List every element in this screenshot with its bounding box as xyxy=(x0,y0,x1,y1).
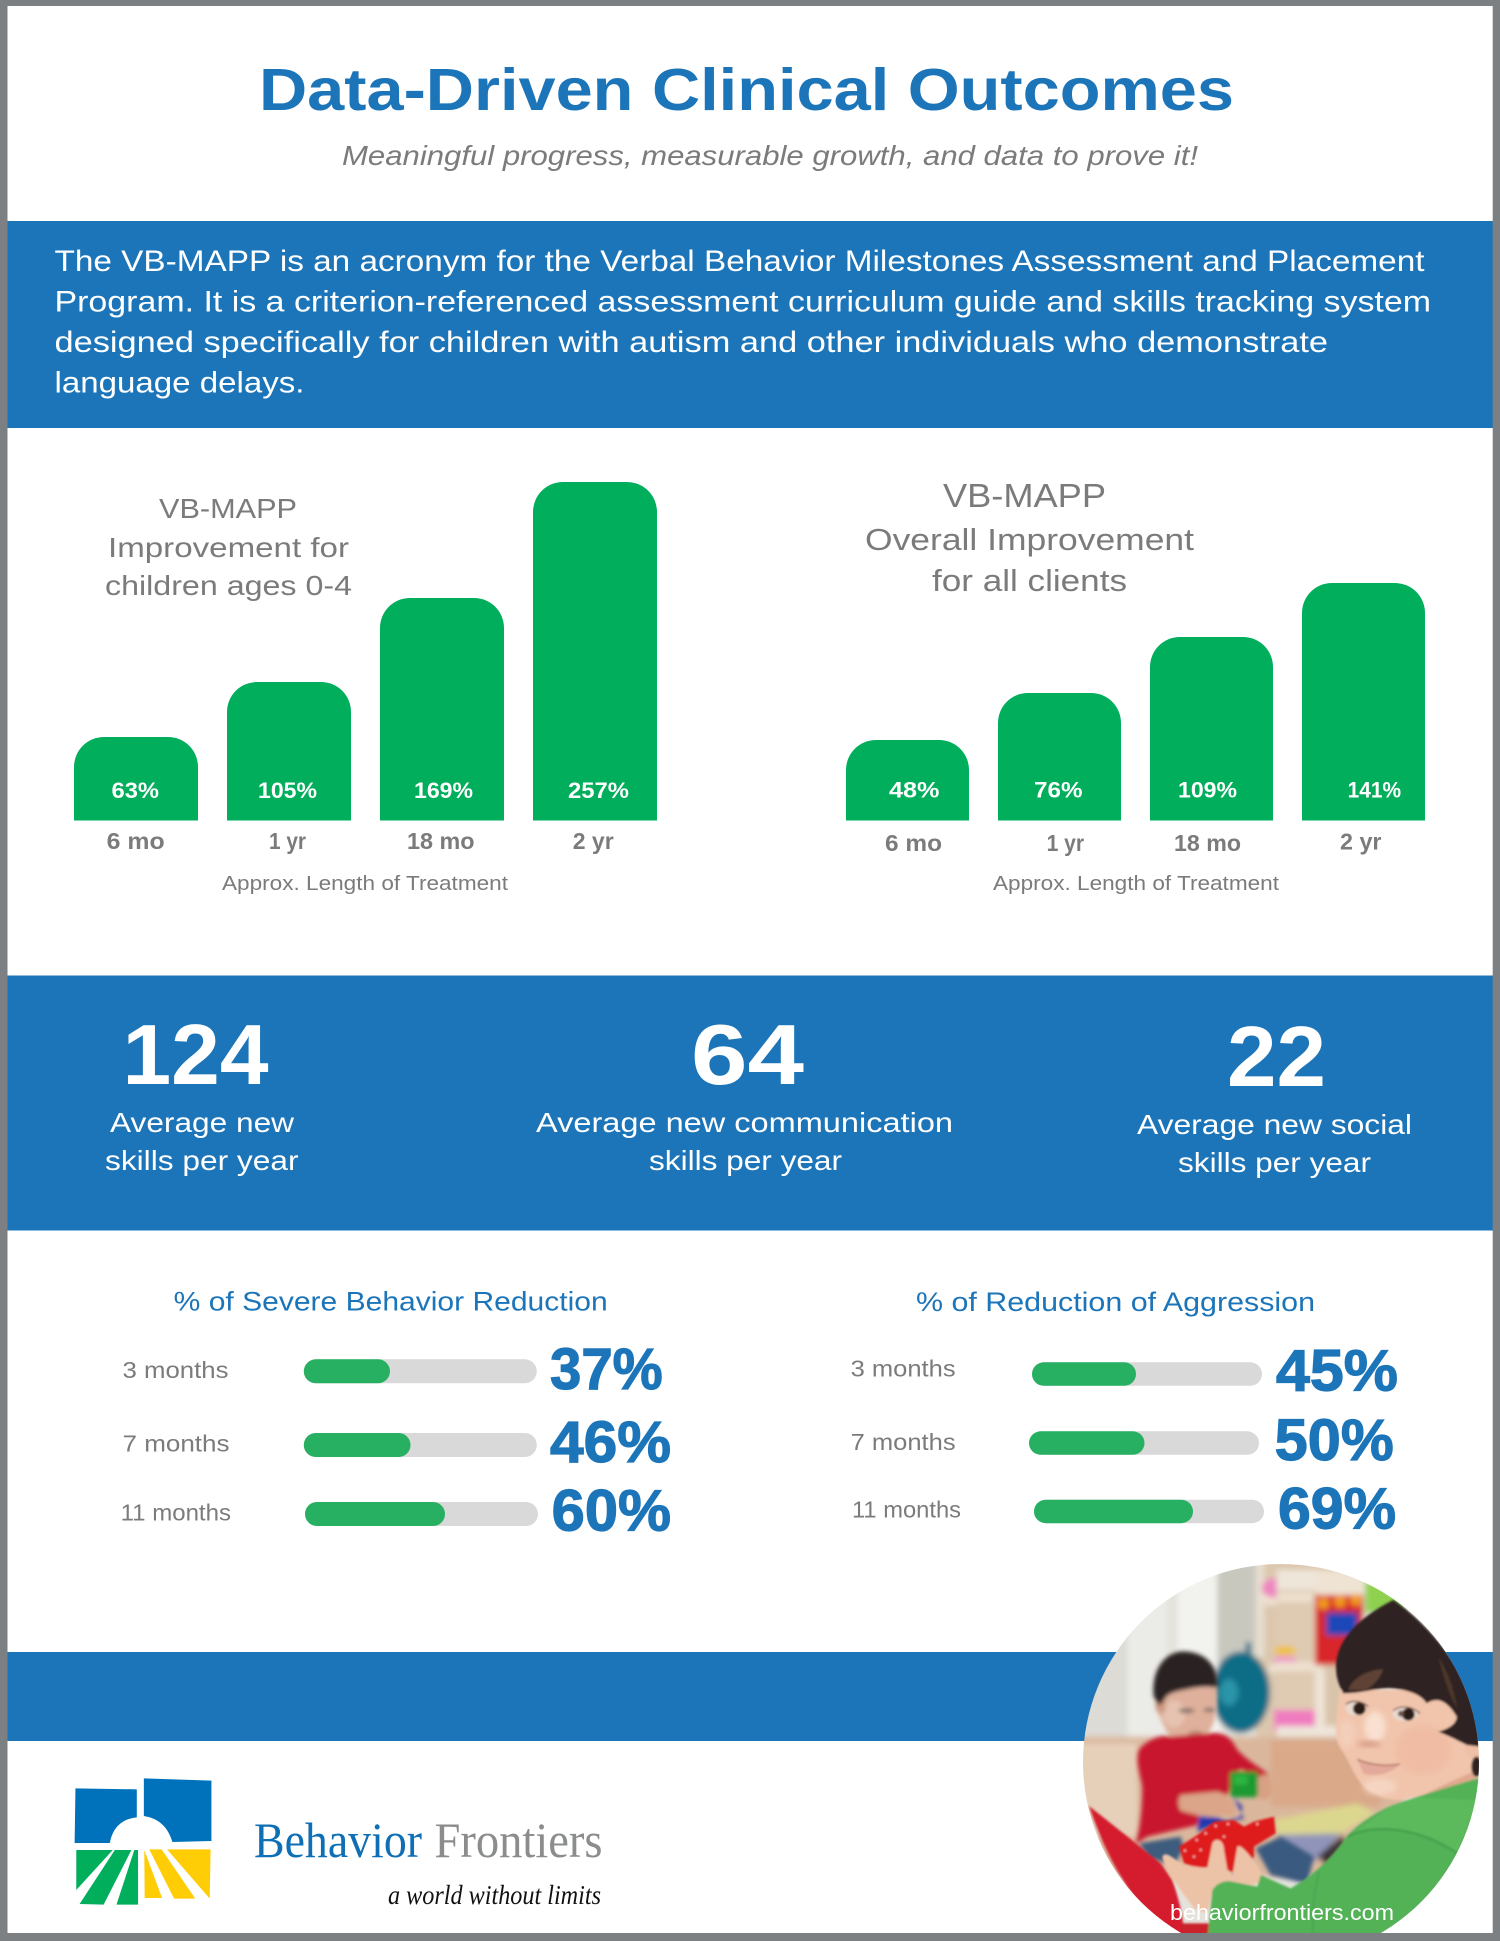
stat: 64 communication skills: skills per year xyxy=(649,1145,842,1176)
bar chart: 2 yr xyxy=(573,828,614,854)
subtitle: Meaningful progress, measurable growth, and data to prove it! xyxy=(342,140,1198,171)
panel: reduction of aggression xyxy=(851,1287,1398,1542)
title: Data-Driven Clinical Outcomes xyxy=(259,57,1234,123)
row: 11 months 60%: 11 months xyxy=(121,1500,231,1526)
photo background: playroom xyxy=(1083,1564,1479,1933)
row: 11 months 69% xyxy=(852,1477,1396,1542)
description text: designed specifically for children with autism and other individuals who demonstrate xyxy=(54,326,1328,359)
bar chart: 6 mo xyxy=(885,830,942,856)
panel: overall improvement for all clients xyxy=(846,477,1425,895)
stat: 64 communication skills: 64 xyxy=(691,1008,804,1103)
panel: VB-MAPP description band xyxy=(0,221,1500,428)
bar chart: 18 mo xyxy=(1174,830,1241,856)
row: 3 months 45%: 45% xyxy=(1276,1339,1398,1404)
description text xyxy=(54,245,1431,400)
stat: 22 social skills: Average new social xyxy=(1137,1109,1412,1140)
row: 3 months 45%: 3 months xyxy=(851,1356,956,1382)
bar chart xyxy=(846,583,1425,856)
brand name: Behavior xyxy=(254,1812,422,1868)
row: 7 months 46%: 46% xyxy=(550,1410,671,1475)
row: 3 months 37%: 37% xyxy=(550,1337,663,1402)
row: 11 months 69%: 69% xyxy=(1278,1477,1396,1542)
row: 11 months 60% xyxy=(121,1479,671,1544)
chart heading: children ages 0-4 xyxy=(105,570,352,601)
stat: 22 social skills: 22 xyxy=(1227,1010,1326,1105)
icon: Behavior Frontiers logo xyxy=(75,1778,211,1905)
bar chart: 1 yr xyxy=(269,828,306,854)
bar chart: 2 yr xyxy=(1340,828,1382,854)
chart heading xyxy=(105,493,352,601)
stat: 124 new skills xyxy=(105,1008,298,1176)
bar chart: 18 mo xyxy=(407,828,474,854)
bar chart: 257% xyxy=(568,778,629,803)
description text: The VB-MAPP is an acronym for the Verbal Behavior Milestones Assessment and Placement xyxy=(54,245,1424,278)
brand name xyxy=(254,1812,602,1868)
section heading: % of Reduction of Aggression xyxy=(916,1287,1315,1317)
bar chart: 109% xyxy=(1178,778,1237,802)
row: 3 months 37% xyxy=(122,1337,663,1402)
chart heading: VB-MAPP xyxy=(943,477,1106,514)
panel: improvement for children ages 0-4 xyxy=(74,482,657,895)
brand name: Frontiers xyxy=(434,1812,602,1868)
boy in red sweater xyxy=(1136,1651,1314,1884)
photo caption: website: behaviorfrontiers.com xyxy=(1170,1900,1394,1925)
stat: 22 social skills: skills per year xyxy=(1178,1147,1371,1178)
stat: 124 new skills: 124 xyxy=(122,1008,268,1103)
bar chart: 1 yr xyxy=(1047,830,1084,856)
bar chart: 48% xyxy=(889,778,940,802)
axis caption: Approx. Length of Treatment xyxy=(993,873,1279,895)
bar chart: 169% xyxy=(414,778,473,803)
row: 11 months 60%: 60% xyxy=(552,1479,671,1544)
bar chart: 63% xyxy=(112,778,159,803)
section heading: % of Severe Behavior Reduction xyxy=(174,1286,608,1316)
stat: 64 communication skills: Average new communication xyxy=(536,1107,953,1138)
row: 7 months 50% xyxy=(851,1408,1394,1473)
chart heading: for all clients xyxy=(932,563,1127,598)
row: 11 months 69%: 11 months xyxy=(852,1497,961,1523)
axis caption: Approx. Length of Treatment xyxy=(222,873,508,895)
stat: 22 social skills xyxy=(1137,1010,1412,1178)
bar chart: 76% xyxy=(1034,778,1082,802)
panel: average new skills band xyxy=(0,976,1500,1230)
chart heading: Improvement for xyxy=(108,532,349,563)
row: 7 months 46%: 7 months xyxy=(122,1431,230,1457)
stat: 124 new skills: skills per year xyxy=(105,1145,298,1176)
panel: severe behavior reduction xyxy=(121,1286,671,1544)
description text: language delays. xyxy=(54,366,304,400)
photo: two children playing xyxy=(1083,1564,1479,1933)
chart heading xyxy=(865,477,1194,598)
row: 7 months 50%: 7 months xyxy=(851,1429,956,1455)
tagline: a world without limits xyxy=(388,1880,601,1910)
chart heading: Overall Improvement xyxy=(865,522,1194,557)
row: 3 months 37%: 3 months xyxy=(122,1357,228,1383)
stat: 124 new skills: Average new xyxy=(110,1107,295,1138)
footer band xyxy=(0,1652,1500,1741)
child in green hoodie with red toy xyxy=(1089,1600,1482,1940)
chart heading: VB-MAPP xyxy=(159,493,297,524)
bar chart: 105% xyxy=(258,778,317,803)
row: 3 months 45% xyxy=(851,1339,1398,1404)
bar chart xyxy=(74,482,657,854)
bar chart: 6 mo xyxy=(107,828,165,854)
row: 7 months 46% xyxy=(122,1410,671,1475)
bar chart: 141% xyxy=(1348,778,1401,802)
stat: 64 communication skills xyxy=(536,1008,953,1176)
row: 7 months 50%: 50% xyxy=(1275,1408,1394,1473)
description text: Program. It is a criterion-referenced assessment curriculum guide and skills tracking system xyxy=(54,286,1431,318)
